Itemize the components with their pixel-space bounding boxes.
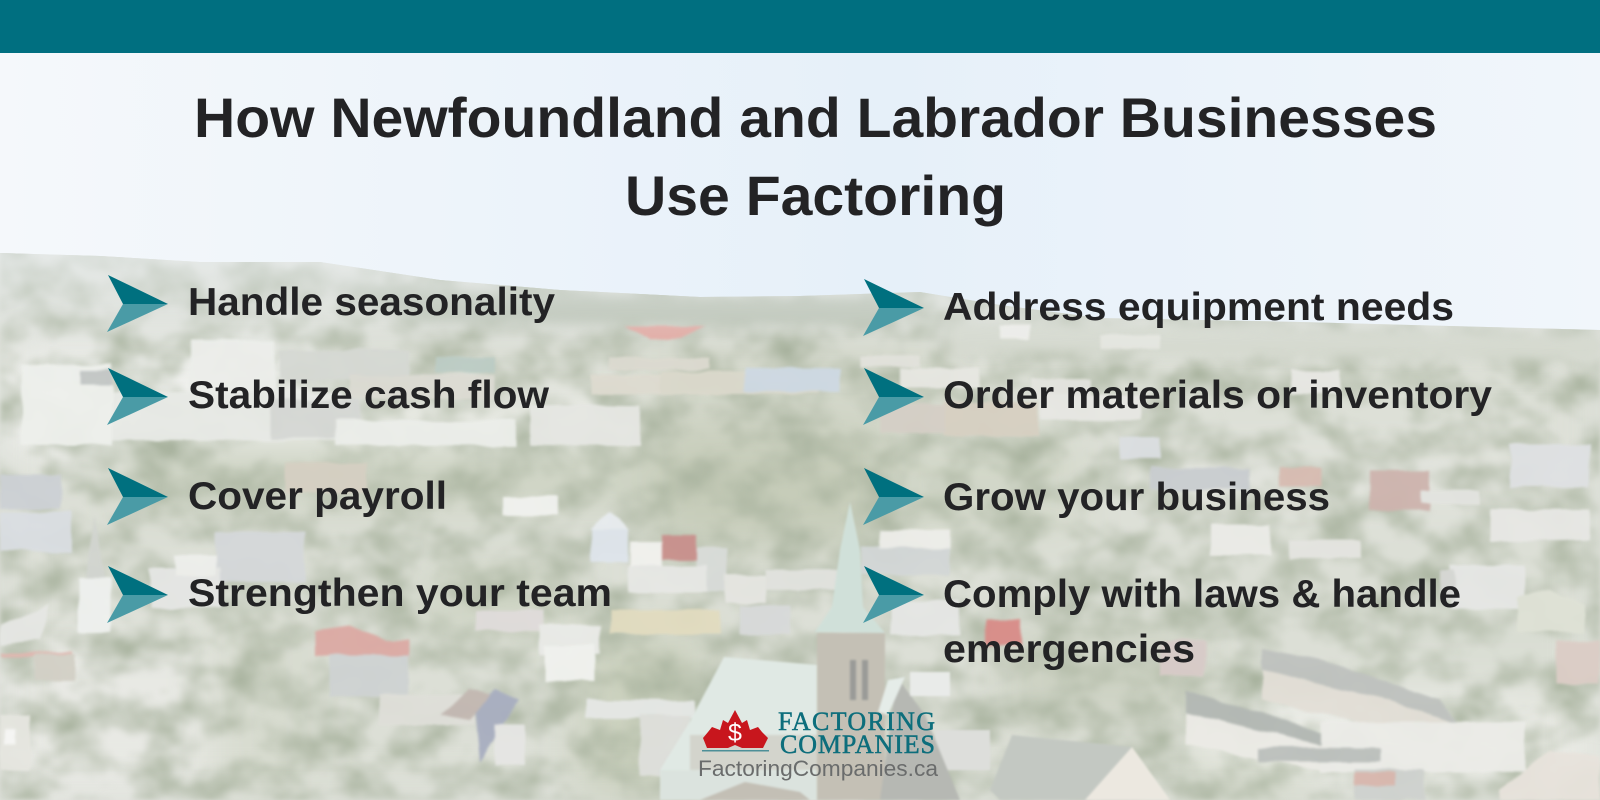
item: address equipment needs (863, 279, 1454, 336)
item: stabilize cash flow (107, 368, 550, 425)
gable house bottom (990, 735, 1132, 800)
red-roof house (315, 625, 410, 660)
title: Use Factoring (625, 164, 1006, 227)
right town (1000, 325, 1030, 339)
list: right column (863, 279, 1492, 671)
row houses (1262, 648, 1460, 725)
title: How Newfoundland and Labrador Businesses (194, 86, 1437, 149)
item: handle seasonality: Handle seasonality (188, 281, 555, 324)
title (194, 86, 1437, 227)
icon: arrow (863, 566, 924, 623)
item: strengthen your team: Strengthen your team (188, 572, 612, 615)
mid houses (285, 463, 367, 493)
logo: Factoring Companies (698, 707, 938, 781)
item: cover payroll (107, 468, 447, 525)
item: cover payroll: Cover payroll (188, 475, 447, 518)
left buildings (22, 365, 112, 445)
item: comply with laws and handle emergencies: Comply with laws & handle (943, 573, 1461, 616)
purple house (475, 690, 520, 762)
background photo: St. John's townscape (0, 253, 1600, 800)
item: grow your business: Grow your business (943, 476, 1330, 519)
item: strengthen your team (107, 566, 612, 623)
logo: Factoring Companies: FactoringCompanies.ca (698, 756, 938, 781)
logo: Factoring Companies: FACTORING (778, 707, 935, 736)
icon: red maple leaf with dollar sign: $ (728, 719, 742, 747)
logo: Factoring Companies: COMPANIES (780, 730, 935, 759)
item: handle seasonality (107, 275, 555, 332)
icon: arrow (107, 566, 168, 623)
icon: arrow (863, 468, 924, 525)
top teal bar (0, 0, 1600, 53)
icon: arrow (107, 368, 168, 425)
icon: arrow (863, 368, 924, 425)
item: comply with laws and handle emergencies: emergencies (943, 628, 1195, 671)
item: stabilize cash flow: Stabilize cash flow (188, 374, 550, 417)
list: left column (107, 275, 612, 623)
item: order materials or inventory: Order materials or inventory (943, 374, 1492, 417)
icon: arrow (863, 279, 924, 336)
item: grow your business (863, 468, 1330, 525)
item: order materials or inventory (863, 368, 1492, 425)
icon: arrow (107, 275, 168, 332)
item: comply with laws and handle emergencies (863, 566, 1461, 671)
icon: arrow (107, 468, 168, 525)
icon: red maple leaf with dollar sign (702, 710, 769, 752)
church (662, 656, 818, 773)
item: address equipment needs: Address equipment needs (943, 286, 1454, 329)
